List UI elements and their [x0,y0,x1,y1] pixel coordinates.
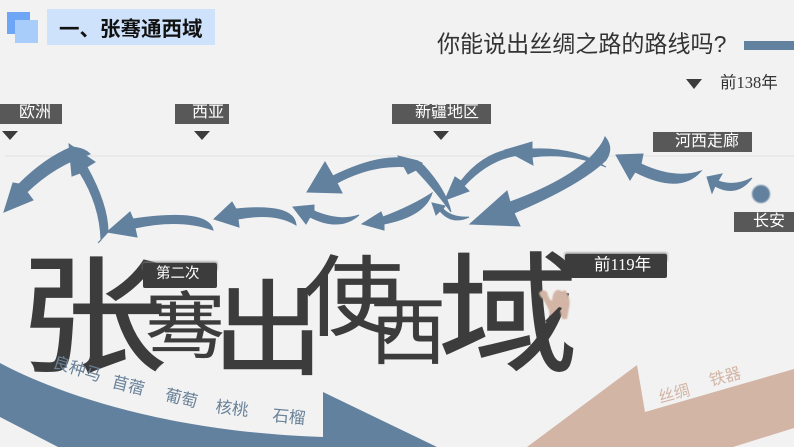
arrow: large return [470,137,610,226]
glyph 张: 张 [18,247,167,390]
label: 欧洲 [0,103,62,124]
label: 河西走廊 [653,132,752,152]
arrow: 河西走廊 [616,154,701,183]
arrow: lower segment 1 [362,193,432,230]
icon: camel [539,290,570,325]
tag: 第二次: 第二次 [156,264,200,282]
arrow: lower small [432,203,469,220]
item 良种马: 良种马 [51,353,104,385]
heading: section title: 一、张骞通西域 [59,17,203,41]
arrow: lower segment 4 [107,212,213,237]
big title: 张骞出使西域 [18,244,578,390]
arrow: lower segment 2 [293,205,359,224]
tag: 前119年: 前119年 [594,255,651,274]
tag: 第二次 [143,262,217,288]
arrow: crossing small [398,156,451,212]
marker: 欧洲 [2,131,18,140]
band: blue swoosh [0,363,437,447]
arrow: down to far west [4,147,90,212]
item 苜蓿: 苜蓿 [110,372,147,399]
label: 河西走廊: 河西走廊 [675,132,739,150]
marker: 西亚 [194,131,210,140]
item 葡萄: 葡萄 [163,385,200,411]
text: eastern exports [656,364,743,407]
arrow: 长安 to 河西 [707,174,752,193]
label: 长安: 长安 [753,212,785,230]
label: 新疆地区 [392,103,491,124]
arrow: lower segment 3 [214,202,296,227]
item 铁器: 铁器 [707,364,743,390]
marker: 新疆地区 [433,131,449,140]
glyph 西: 西 [370,291,446,374]
item 石榴: 石榴 [272,406,306,428]
tag: 前119年 [565,253,667,278]
label: 西亚 [175,104,229,124]
arrow: large to 西亚 [307,158,422,193]
item 丝绸: 丝绸 [656,381,692,407]
arrow: up to 欧洲 [69,144,108,243]
decorative bar [744,41,794,50]
label: 西亚: 西亚 [192,104,224,121]
arrow: upper to 新疆 continued [445,148,520,200]
label: 长安 [734,212,794,232]
icon: overlapping squares [7,12,38,43]
marker: 前138年 [686,73,778,92]
band: tan swoosh [527,365,794,447]
item 核桃: 核桃 [215,397,250,420]
glyph 骞: 骞 [145,287,225,368]
glyph 使: 使 [303,249,403,347]
label: 欧洲: 欧洲 [19,103,51,121]
glyph 域: 域 [438,244,578,389]
heading: section title [47,9,215,45]
question text: 你能说出丝绸之路的路线吗? [437,31,726,57]
marker: 前138年: 前138年 [720,73,778,92]
route arrows [4,137,752,243]
text: western imports [51,353,306,428]
label: 新疆地区: 新疆地区 [415,103,479,121]
arrow: upper to 新疆 [505,142,606,167]
glyph 出: 出 [213,273,323,388]
icon: 长安 dot [752,185,770,203]
